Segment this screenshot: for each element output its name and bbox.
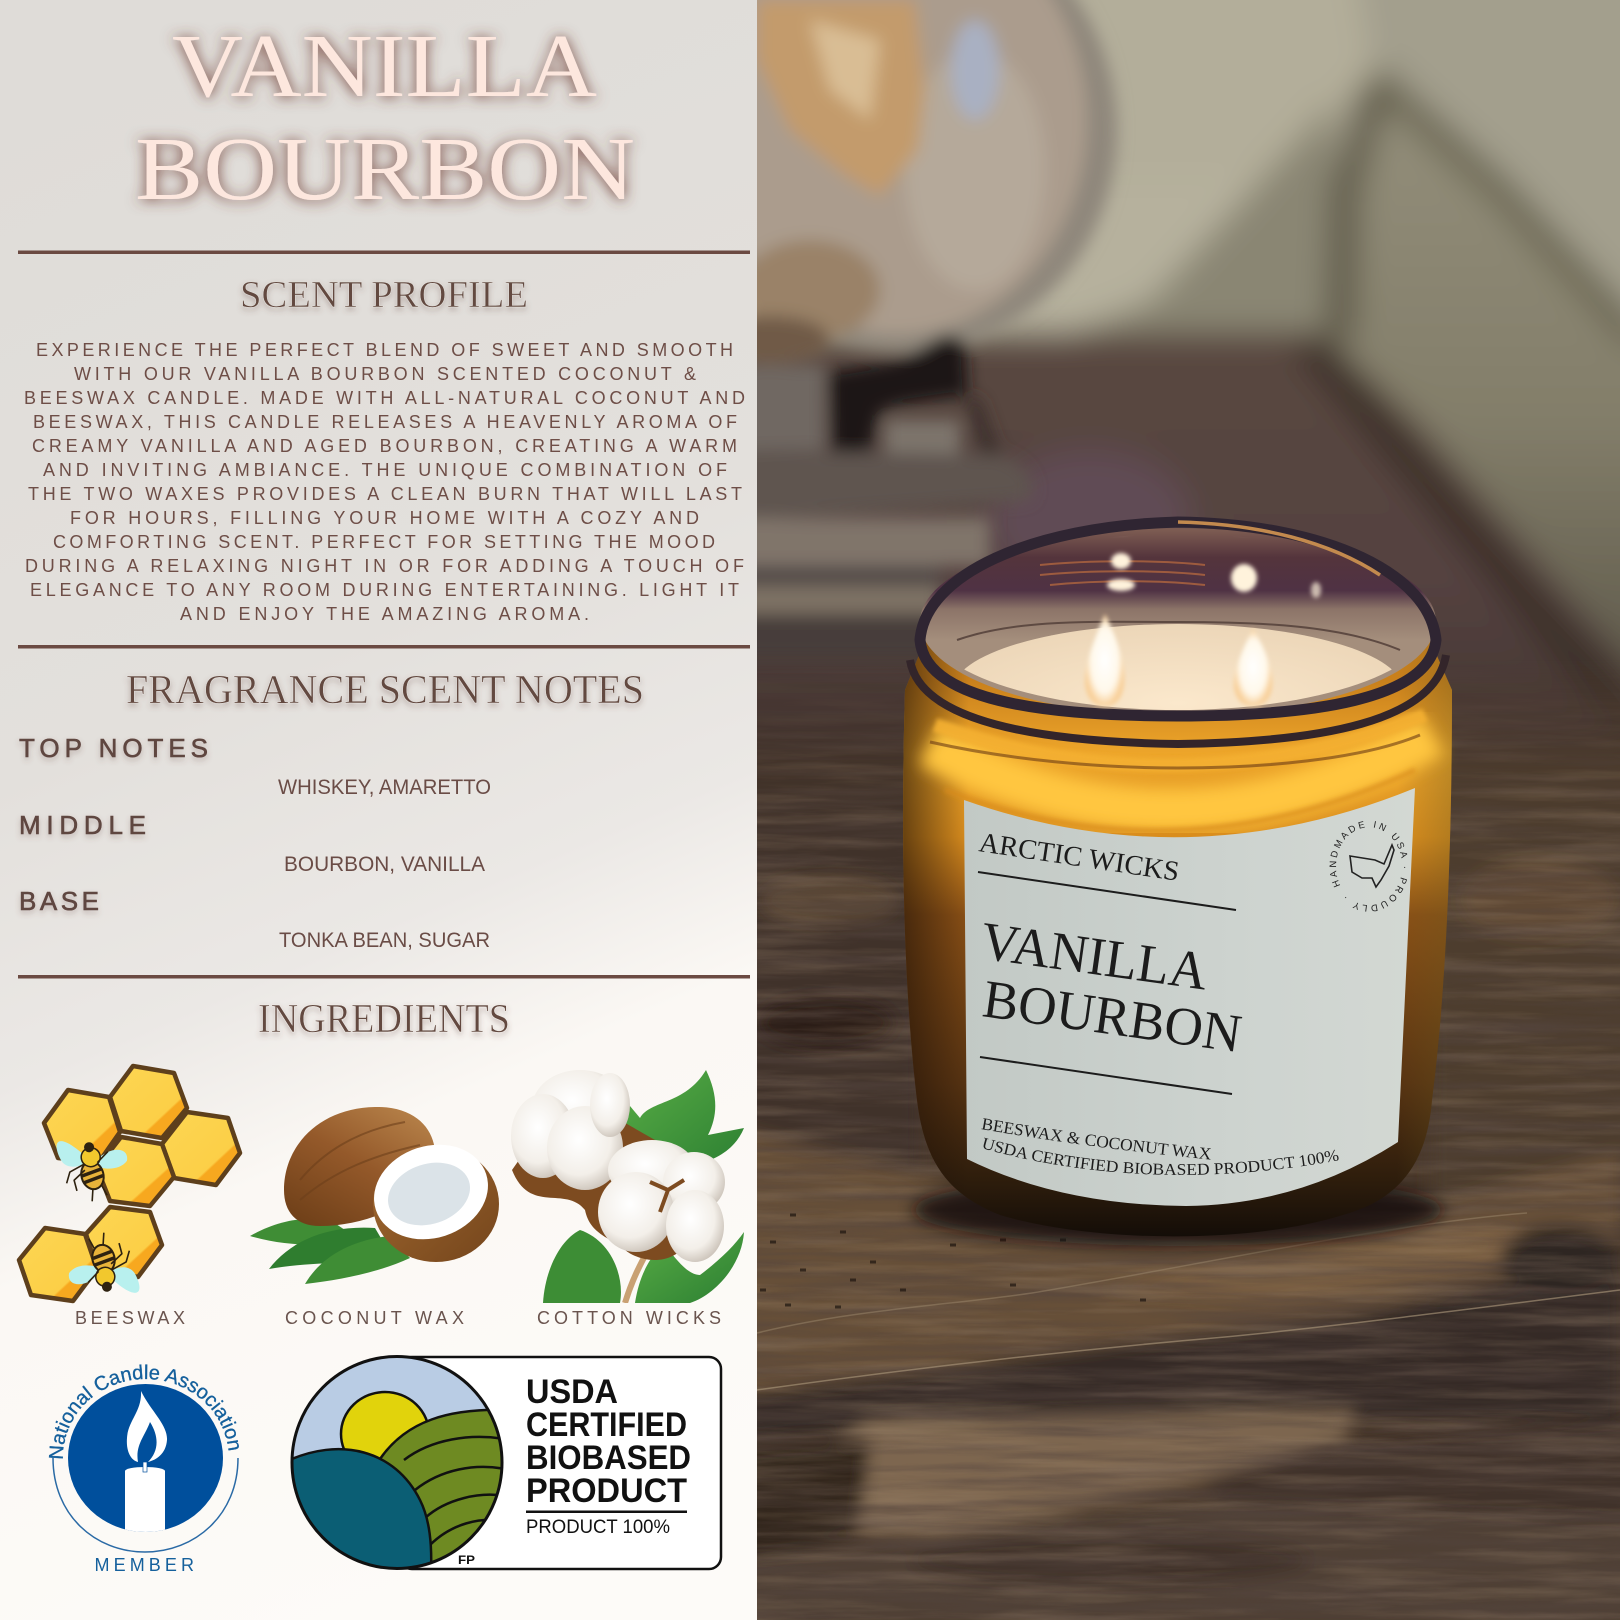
photo background: globe on stand	[757, 0, 1123, 622]
icon: coconut	[250, 1107, 500, 1284]
text block: fragrance notes list: TOP NOTES	[19, 733, 208, 763]
label text: brand and scent: VANILLA	[977, 910, 1211, 1002]
text: USDA label: BIOBASED	[526, 1439, 691, 1477]
text block: fragrance notes list: BASE	[19, 886, 99, 916]
icon: USDA landscape	[290, 1355, 504, 1570]
photo: wooden table surface	[757, 712, 1620, 1620]
text: USDA label: PRODUCT	[526, 1472, 687, 1510]
text block: scent description: AND INVITING AMBIANCE. THE UNIQUE COMBINATION OF	[43, 460, 727, 480]
text block: scent description: ELEGANCE TO ANY ROOM DURING ENTERTAINING. LIGHT IT	[30, 580, 739, 600]
title: Vanilla Bourbon: BOURBON	[135, 120, 635, 219]
photo background: wall and box	[757, 0, 1620, 712]
label text: brand and scent: ARCTIC WICKS	[977, 827, 1181, 888]
panel: left information column	[0, 0, 757, 1620]
jar body	[903, 640, 1452, 1236]
text block: scent description: BEESWAX CANDLE. MADE WITH ALL-NATURAL COCONUT AND	[24, 388, 745, 408]
badge: National Candle Association member: National Candle Association	[48, 1364, 239, 1458]
jar rim and glass interior	[910, 522, 1446, 768]
text block: scent description: FOR HOURS, FILLING YOUR HOME WITH A COZY AND	[70, 508, 699, 528]
text: USDA label: PRODUCT 100%	[526, 1516, 670, 1538]
title: Vanilla Bourbon: VANILLA	[172, 17, 597, 116]
icon: handmade in USA stamp: HANDMADE IN USA · PROUDLY ·	[1330, 821, 1408, 912]
label text: brand and scent: USDA CERTIFIED BIOBASED PRODUCT 100%	[984, 1138, 1339, 1175]
text block: scent description: THE TWO WAXES PROVIDES A CLEAN BURN THAT WILL LAST	[28, 484, 742, 504]
heading: scent profile: SCENT PROFILE	[240, 274, 528, 316]
text block: scent description: DURING A RELAXING NIGHT IN OR FOR ADDING A TOUCH OF	[25, 556, 744, 576]
heading: fragrance scent notes: FRAGRANCE SCENT NOTES	[126, 666, 644, 712]
text block: scent description: EXPERIENCE THE PERFECT BLEND OF SWEET AND SMOOTH	[36, 340, 733, 360]
jar label	[964, 788, 1415, 1206]
amber glow bands	[930, 715, 1432, 830]
badge: USDA certified biobased product	[285, 1350, 721, 1572]
text: USDA label: CERTIFIED	[526, 1406, 687, 1444]
text block: fragrance notes list: MIDDLE	[19, 810, 146, 840]
text: USDA label	[458, 1373, 691, 1567]
text block: scent description	[24, 340, 745, 624]
badge: National Candle Association member	[48, 1364, 239, 1575]
text block: ingredient captions: COTTON WICKS	[537, 1308, 721, 1328]
text: USDA label: FP	[458, 1553, 475, 1567]
text block: ingredient captions: COCONUT WAX	[285, 1308, 464, 1328]
heading: ingredients: INGREDIENTS	[258, 995, 510, 1041]
badge: National Candle Association member: MEMBER	[94, 1555, 194, 1575]
reflections of flames	[1104, 550, 1324, 600]
label text: brand and scent: BOURBON	[979, 968, 1245, 1064]
title: Vanilla Bourbon	[135, 17, 635, 219]
label text: brand and scent	[978, 834, 1339, 1175]
text block: ingredient captions: BEESWAX	[75, 1308, 185, 1328]
label text: brand and scent: BEESWAX & COCONUT WAX	[981, 1118, 1211, 1160]
icon: cotton plant	[511, 1070, 744, 1303]
text block: ingredient captions	[75, 1308, 721, 1328]
text block: fragrance notes list: WHISKEY, AMARETTO	[278, 776, 491, 799]
text block: scent description: AND ENJOY THE AMAZING AROMA.	[180, 604, 589, 624]
text block: fragrance notes list	[19, 733, 491, 952]
text block: scent description: WITH OUR VANILLA BOURBON SCENTED COCONUT &	[74, 364, 696, 384]
text block: scent description: BEESWAX, THIS CANDLE RELEASES A HEAVENLY AROMA OF	[33, 412, 737, 432]
photo: lit candle on a wooden table	[757, 0, 1620, 1620]
text block: scent description: CREAMY VANILLA AND AGED BOURBON, CREATING A WARM	[32, 436, 737, 456]
icon: honeycomb with bees	[19, 1066, 240, 1308]
flames	[1085, 614, 1272, 706]
text block: fragrance notes list: TONKA BEAN, SUGAR	[279, 929, 490, 952]
text block: fragrance notes list: BOURBON, VANILLA	[284, 853, 485, 876]
candle jar	[903, 516, 1452, 1256]
text: USDA label: USDA	[526, 1373, 618, 1411]
text block: scent description: COMFORTING SCENT. PERFECT FOR SETTING THE MOOD	[53, 532, 715, 552]
